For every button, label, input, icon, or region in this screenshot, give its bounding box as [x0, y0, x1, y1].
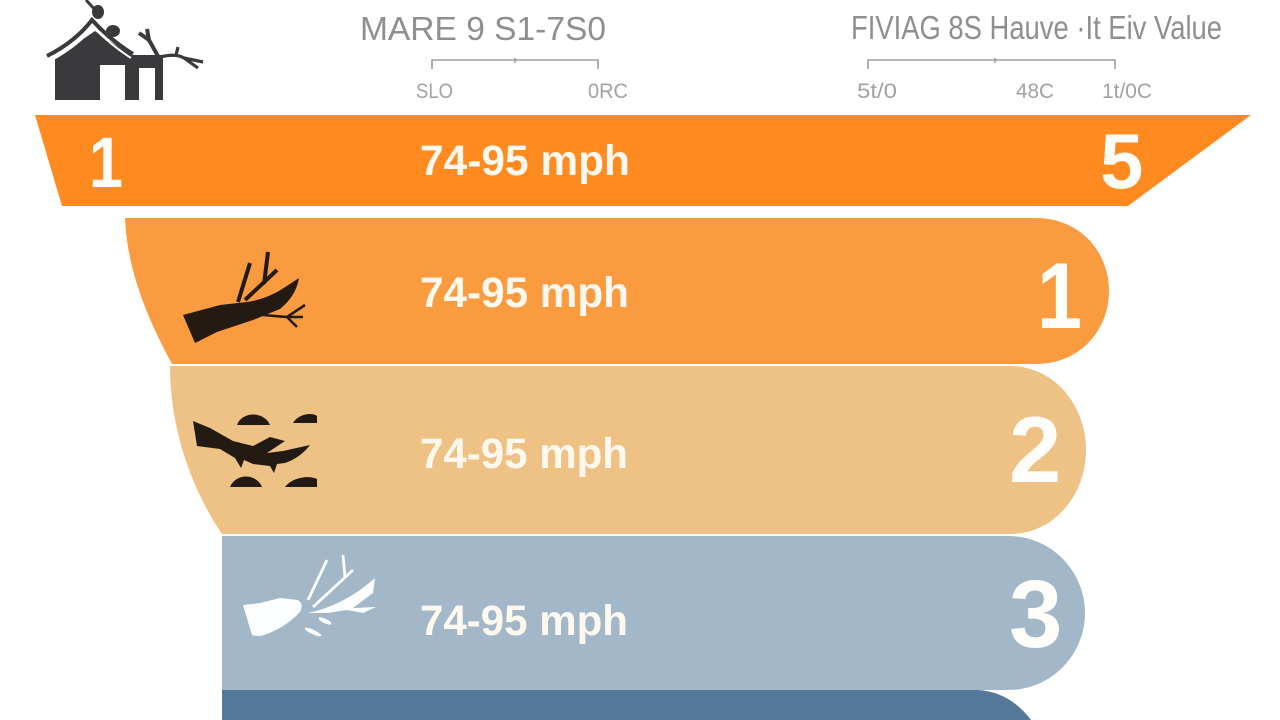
right number: 5	[1100, 117, 1143, 205]
icon: broken branch	[183, 252, 305, 343]
right scale start label: 5t/0	[857, 80, 897, 103]
number: 1	[1037, 243, 1082, 348]
left scale start label: SLO	[416, 80, 453, 103]
panel: category 2	[170, 366, 1086, 534]
panel: category 3	[222, 536, 1085, 690]
wind speed: 74-95 mph	[420, 269, 629, 317]
wind speed: 74-95 mph	[420, 597, 628, 645]
band shape	[170, 366, 1086, 534]
right scale end label: 1t/0C	[1102, 80, 1152, 103]
right scale middle label: 48C	[1016, 80, 1054, 103]
left number: 1	[89, 124, 123, 203]
left scale title: MARE 9 S1-7S0	[360, 10, 606, 47]
band shape	[35, 115, 1251, 206]
icon: damaged house with branch	[47, 0, 203, 100]
heading: left scale	[360, 10, 628, 103]
panel: category 1	[125, 218, 1109, 364]
wind speed: 74-95 mph	[420, 137, 630, 185]
heading: right scale	[851, 9, 1222, 103]
right scale bracket	[868, 58, 1115, 69]
panel: top orange band	[35, 115, 1251, 206]
left scale bracket	[432, 58, 598, 69]
icon: snapped branch with debris	[193, 414, 317, 487]
left scale end label: 0RC	[588, 80, 628, 103]
band shape	[125, 218, 1109, 364]
wind speed: 74-95 mph	[420, 430, 628, 478]
panel: category 4 (cropped)	[222, 690, 1031, 720]
number: 2	[1009, 397, 1061, 502]
band shape	[222, 536, 1085, 690]
icon: shattered branch	[243, 555, 376, 638]
number: 3	[1009, 561, 1062, 668]
